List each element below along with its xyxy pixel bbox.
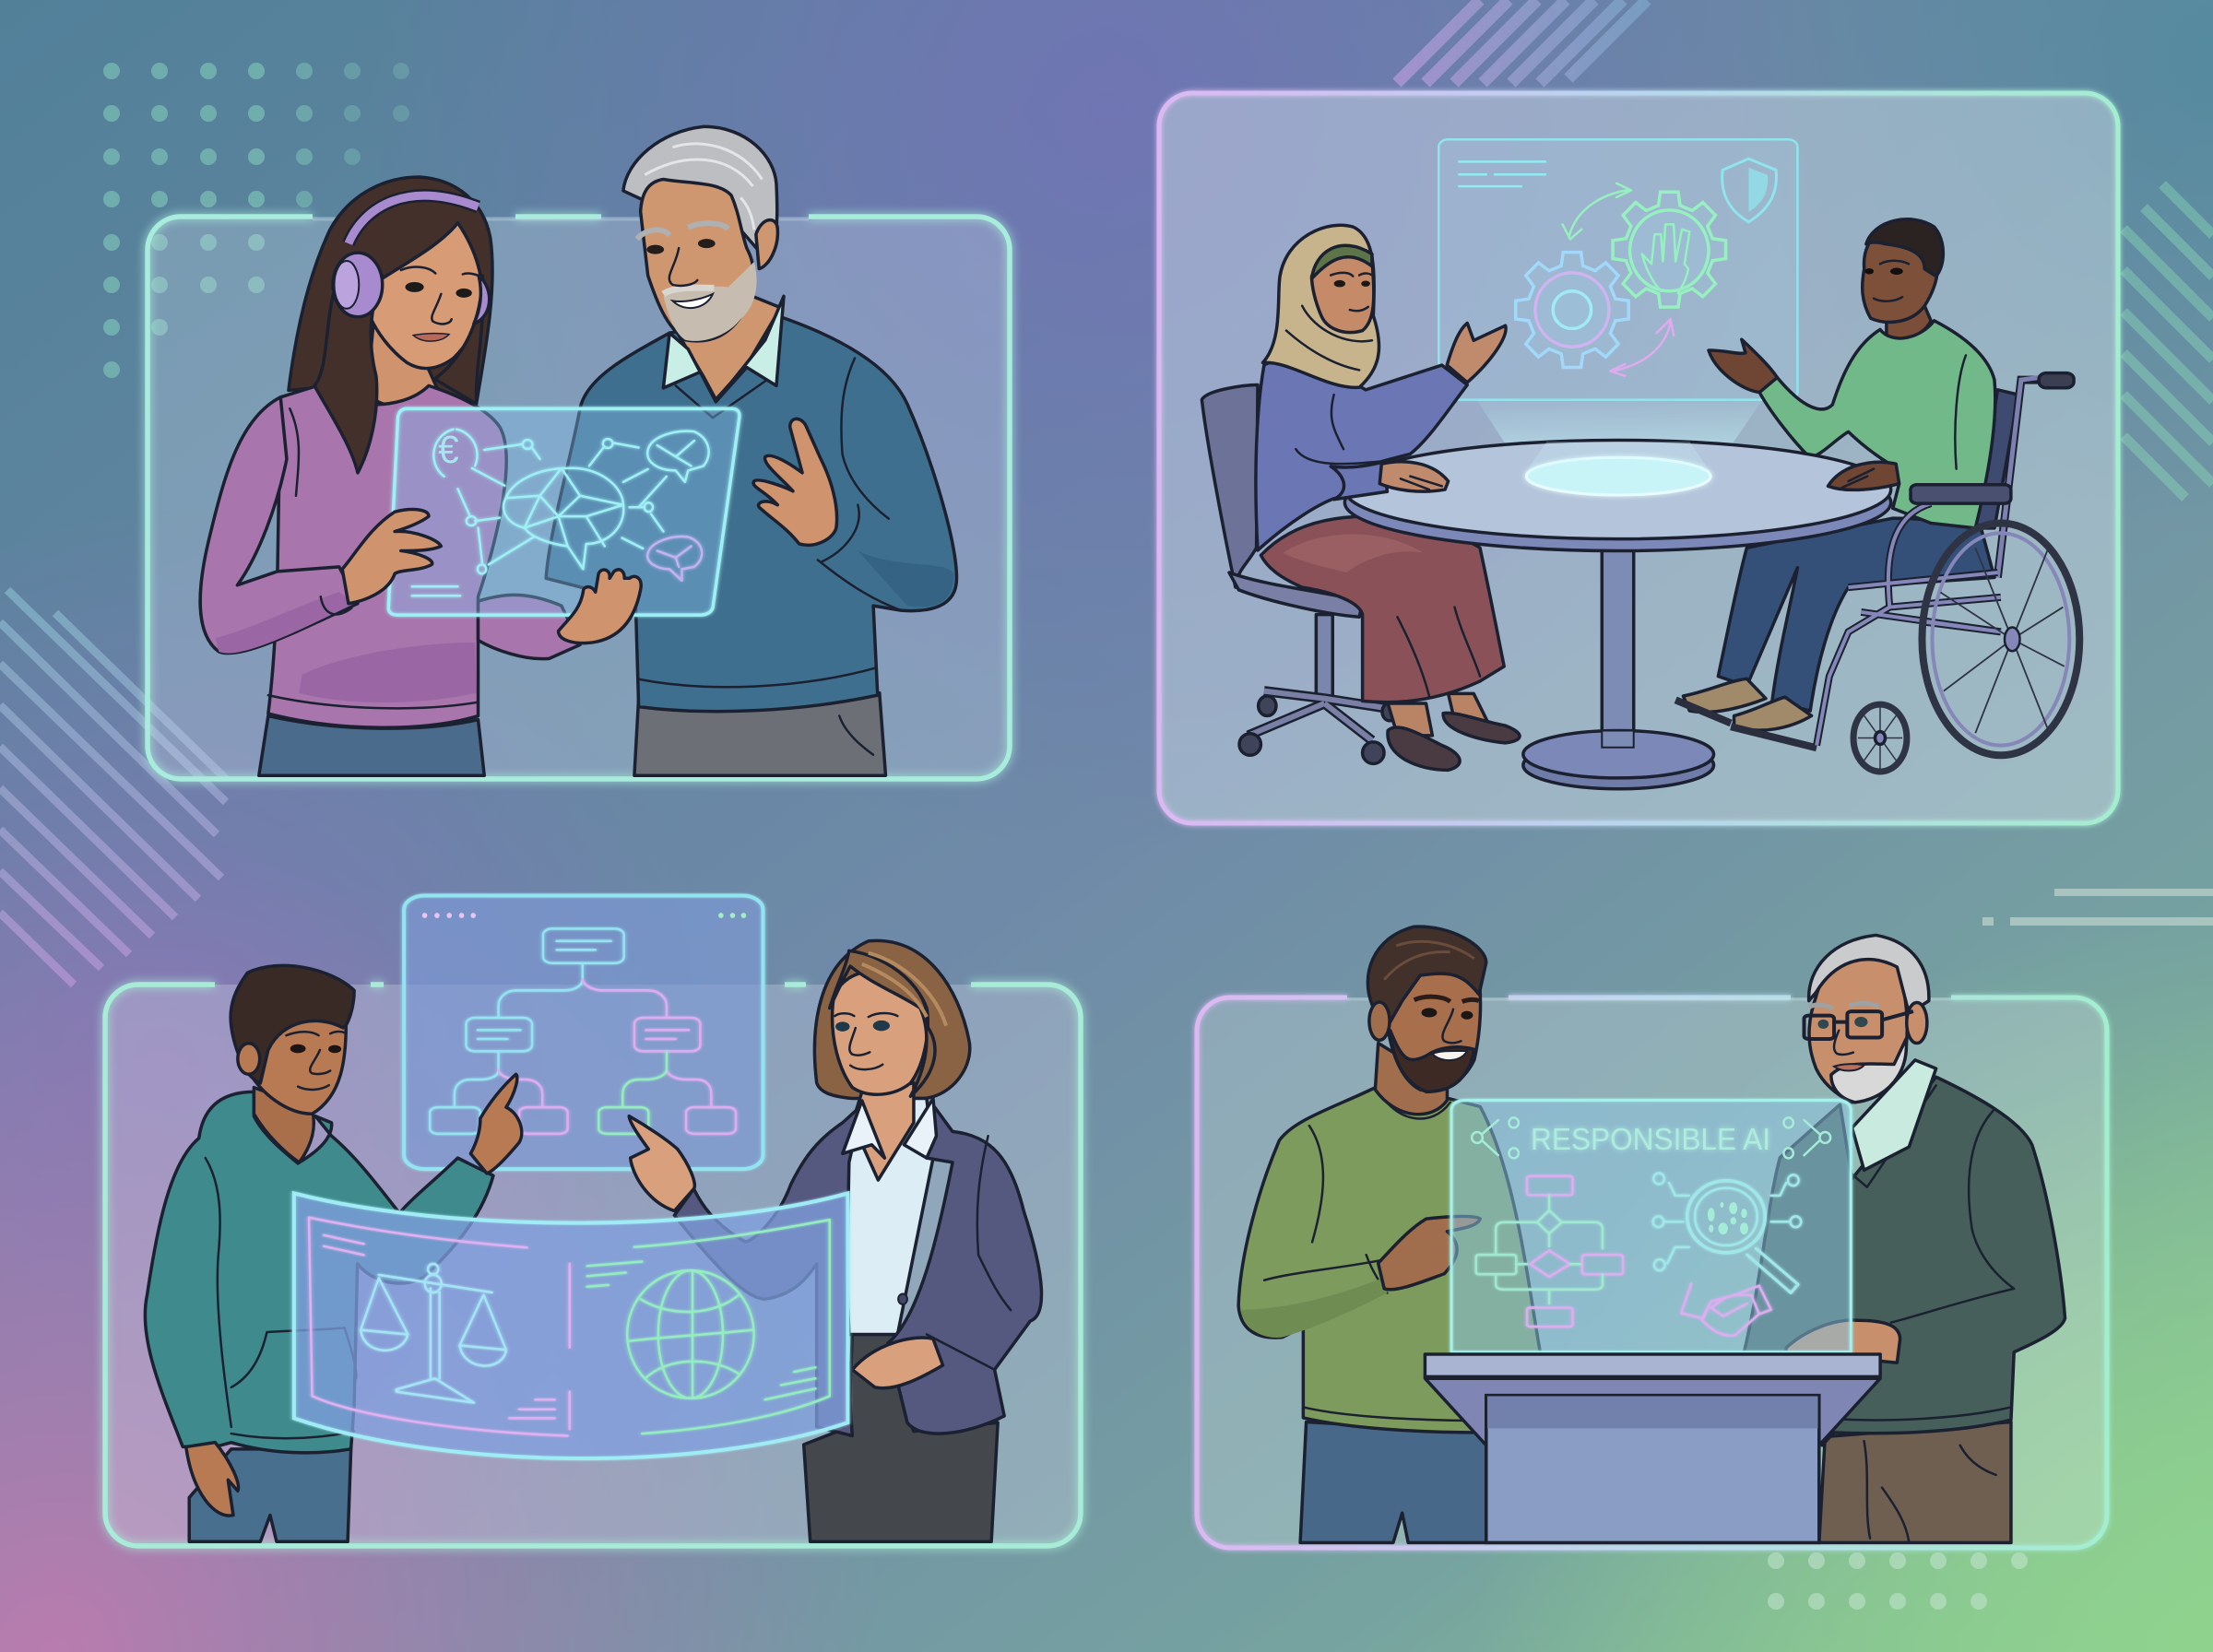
dot grid: top left bbox=[103, 63, 409, 378]
dot grid: bottom right bbox=[1768, 1552, 2028, 1610]
network and brain icons bbox=[412, 430, 709, 596]
panel frame top left bbox=[148, 217, 1010, 779]
diagonal stripes: right edge bbox=[2124, 184, 2213, 498]
figure: woman in hijab with chair bbox=[1201, 225, 1520, 770]
curved glass screen with scales and globe bbox=[294, 1193, 847, 1458]
office chair bbox=[1201, 384, 1398, 763]
diagonal stripes: left edge bbox=[0, 590, 226, 985]
shield icon bbox=[1722, 159, 1776, 222]
panel: round table discussion with wheelchair user bbox=[1159, 93, 2118, 823]
magnifier with data icon bbox=[1653, 1173, 1801, 1292]
diagonal stripes: top right bbox=[1397, 0, 1647, 83]
wheelchair bbox=[1675, 485, 2079, 772]
globe icon bbox=[627, 1270, 754, 1398]
circular arrows bbox=[1563, 183, 1674, 376]
scene artwork bottom left bbox=[145, 896, 1041, 1541]
forearms and hands on table bbox=[1331, 462, 1899, 500]
panel: girl and man with euro brain tablet bbox=[148, 126, 1010, 779]
scales icon bbox=[361, 1264, 506, 1403]
panel frame top right bbox=[1159, 93, 2118, 823]
figure: man in green sweater bbox=[1709, 219, 1995, 711]
scene artwork top right bbox=[1201, 139, 2079, 789]
hand in gear icon bbox=[1642, 224, 1689, 293]
dashes: right middle bbox=[1982, 889, 2213, 926]
light beam and ring projector bbox=[1477, 400, 1763, 474]
wheelchair back structure bbox=[1975, 373, 2074, 577]
panel: two men at podium with responsible AI screen bbox=[1197, 926, 2107, 1548]
figure: older man with glasses bbox=[1744, 935, 2065, 1542]
euro symbol: € bbox=[438, 427, 459, 471]
panel frame bottom right bbox=[1197, 997, 2107, 1548]
circuit nodes corners bbox=[1472, 1117, 1830, 1158]
scene artwork bottom right bbox=[1238, 926, 2065, 1542]
flowchart icon bbox=[1476, 1176, 1623, 1327]
screen title text: RESPONSIBLE AI bbox=[1531, 1122, 1770, 1156]
girl's hands bbox=[342, 510, 641, 643]
figure: teen boy in teal hoodie bbox=[145, 965, 522, 1541]
panel frame bottom left bbox=[105, 985, 1081, 1546]
tree nodes and connectors bbox=[430, 928, 736, 1134]
figure: older man with grey hair bbox=[546, 126, 956, 775]
hologram gears screen bbox=[1438, 139, 1797, 400]
handshake icon bbox=[1681, 1283, 1771, 1336]
inner frame lines bbox=[309, 1218, 830, 1435]
holographic tablet bbox=[388, 408, 740, 615]
round table bbox=[1344, 440, 1891, 789]
figure: girl with headphones bbox=[200, 177, 580, 775]
figure: bearded man in green sweater bbox=[1238, 926, 1540, 1542]
scene artwork top left bbox=[200, 126, 956, 775]
data dots in lens bbox=[1708, 1202, 1748, 1234]
decision tree screen bbox=[404, 896, 763, 1169]
podium bbox=[1425, 1354, 1880, 1542]
projector ring bbox=[1526, 457, 1710, 495]
panel: boy and woman pointing at decision tree bbox=[105, 896, 1081, 1546]
glass screen panel bbox=[1451, 1101, 1851, 1352]
figure: woman in blazer bbox=[629, 940, 1041, 1541]
